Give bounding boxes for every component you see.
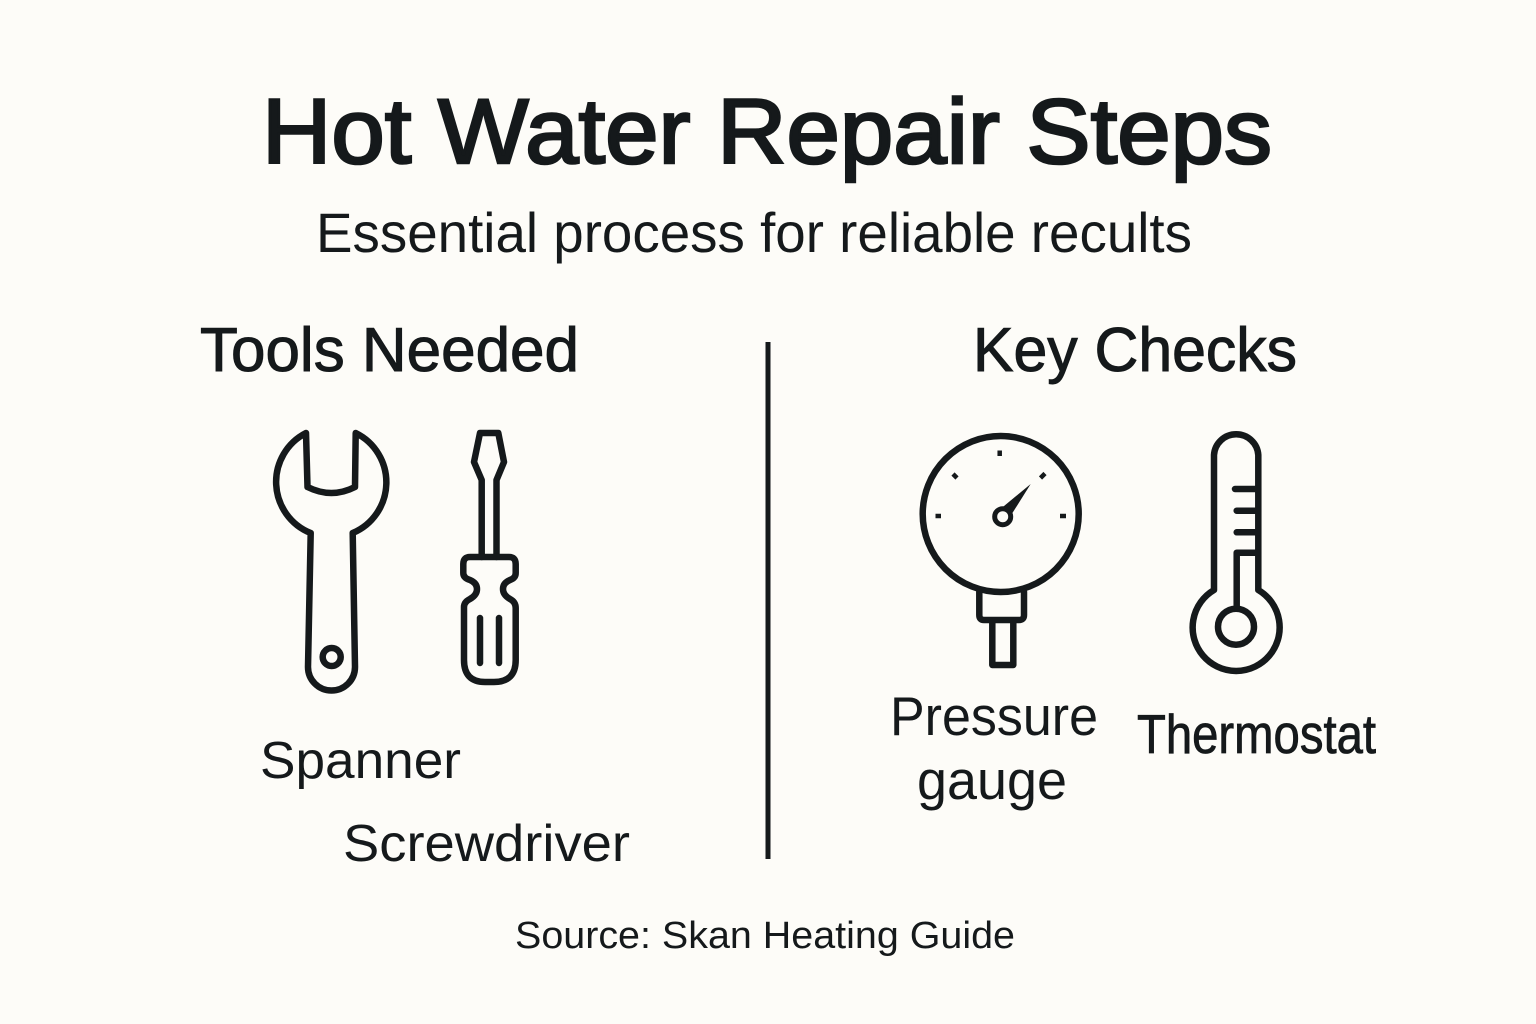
label: thermostat: Thermostat — [1137, 703, 1376, 765]
label: pressure gauge: gauge — [917, 749, 1067, 811]
label: spanner: Spanner — [260, 732, 461, 790]
panel: tools needed — [200, 316, 630, 873]
heading: key checks: Key Checks — [973, 316, 1297, 385]
icon: screwdriver — [463, 433, 516, 682]
icon: spanner — [276, 433, 386, 690]
label: screwdriver: Screwdriver — [343, 815, 630, 873]
label: pressure gauge: Pressure — [890, 685, 1098, 747]
icon: pressure gauge — [923, 436, 1079, 665]
subtitle: Essential process for reliable recults — [316, 201, 1192, 264]
label: pressure gauge — [890, 685, 1098, 811]
panel: key checks — [890, 316, 1376, 811]
icon: thermometer — [1193, 434, 1280, 671]
divider — [766, 342, 770, 859]
source: Source: Skan Heating Guide — [515, 915, 1015, 957]
heading: tools needed: Tools Needed — [200, 316, 579, 385]
title: Hot Water Repair Steps — [262, 81, 1272, 183]
